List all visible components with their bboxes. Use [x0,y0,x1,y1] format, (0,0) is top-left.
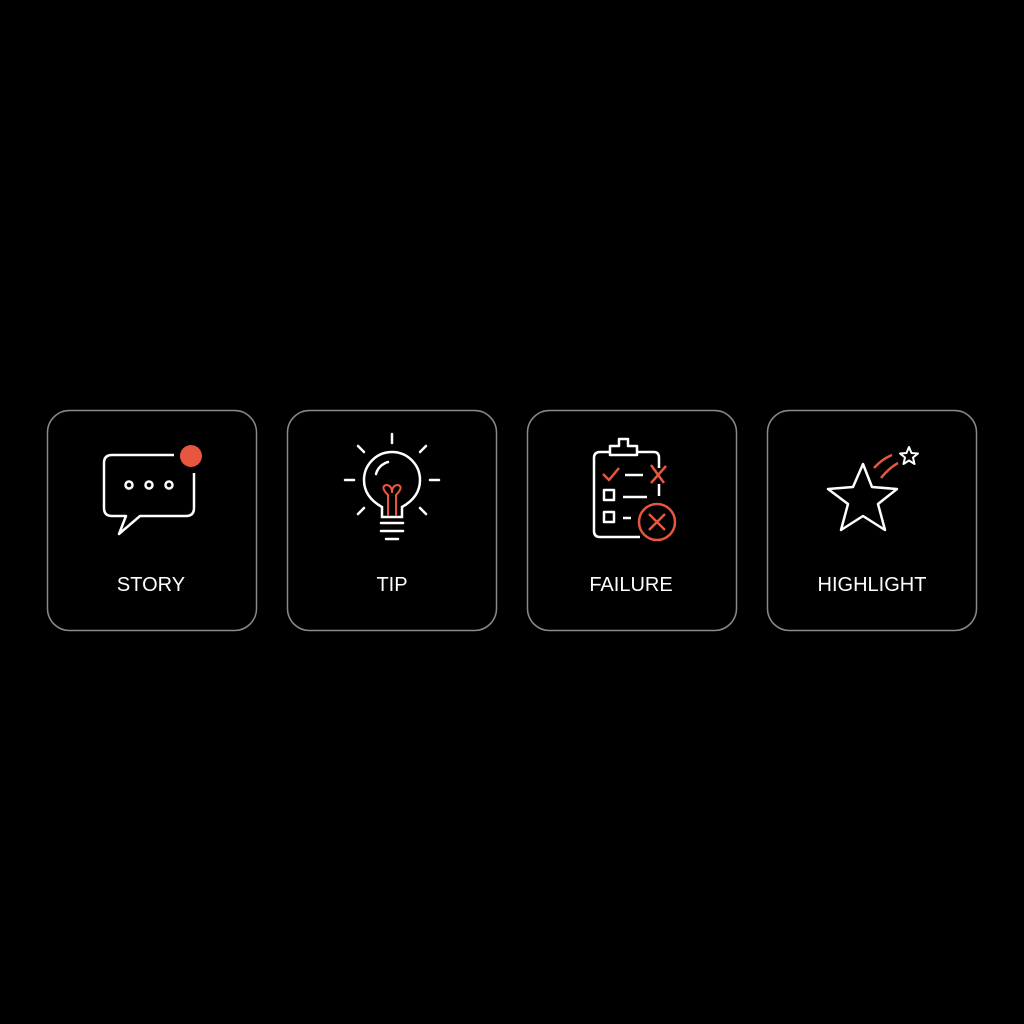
label: story: STORY [117,574,185,596]
icon: clipboard [594,439,675,540]
panel: story [48,410,256,630]
icon: shooting star [828,447,918,530]
label: failure: FAILURE [589,574,673,596]
panel: highlight [768,410,976,630]
label: highlight: HIGHLIGHT [818,574,926,596]
icon: chat bubble [104,445,202,534]
label: tip: TIP [376,574,408,596]
panel: failure [528,410,736,630]
panel: tip [288,410,496,630]
icon: light bulb [345,434,439,539]
